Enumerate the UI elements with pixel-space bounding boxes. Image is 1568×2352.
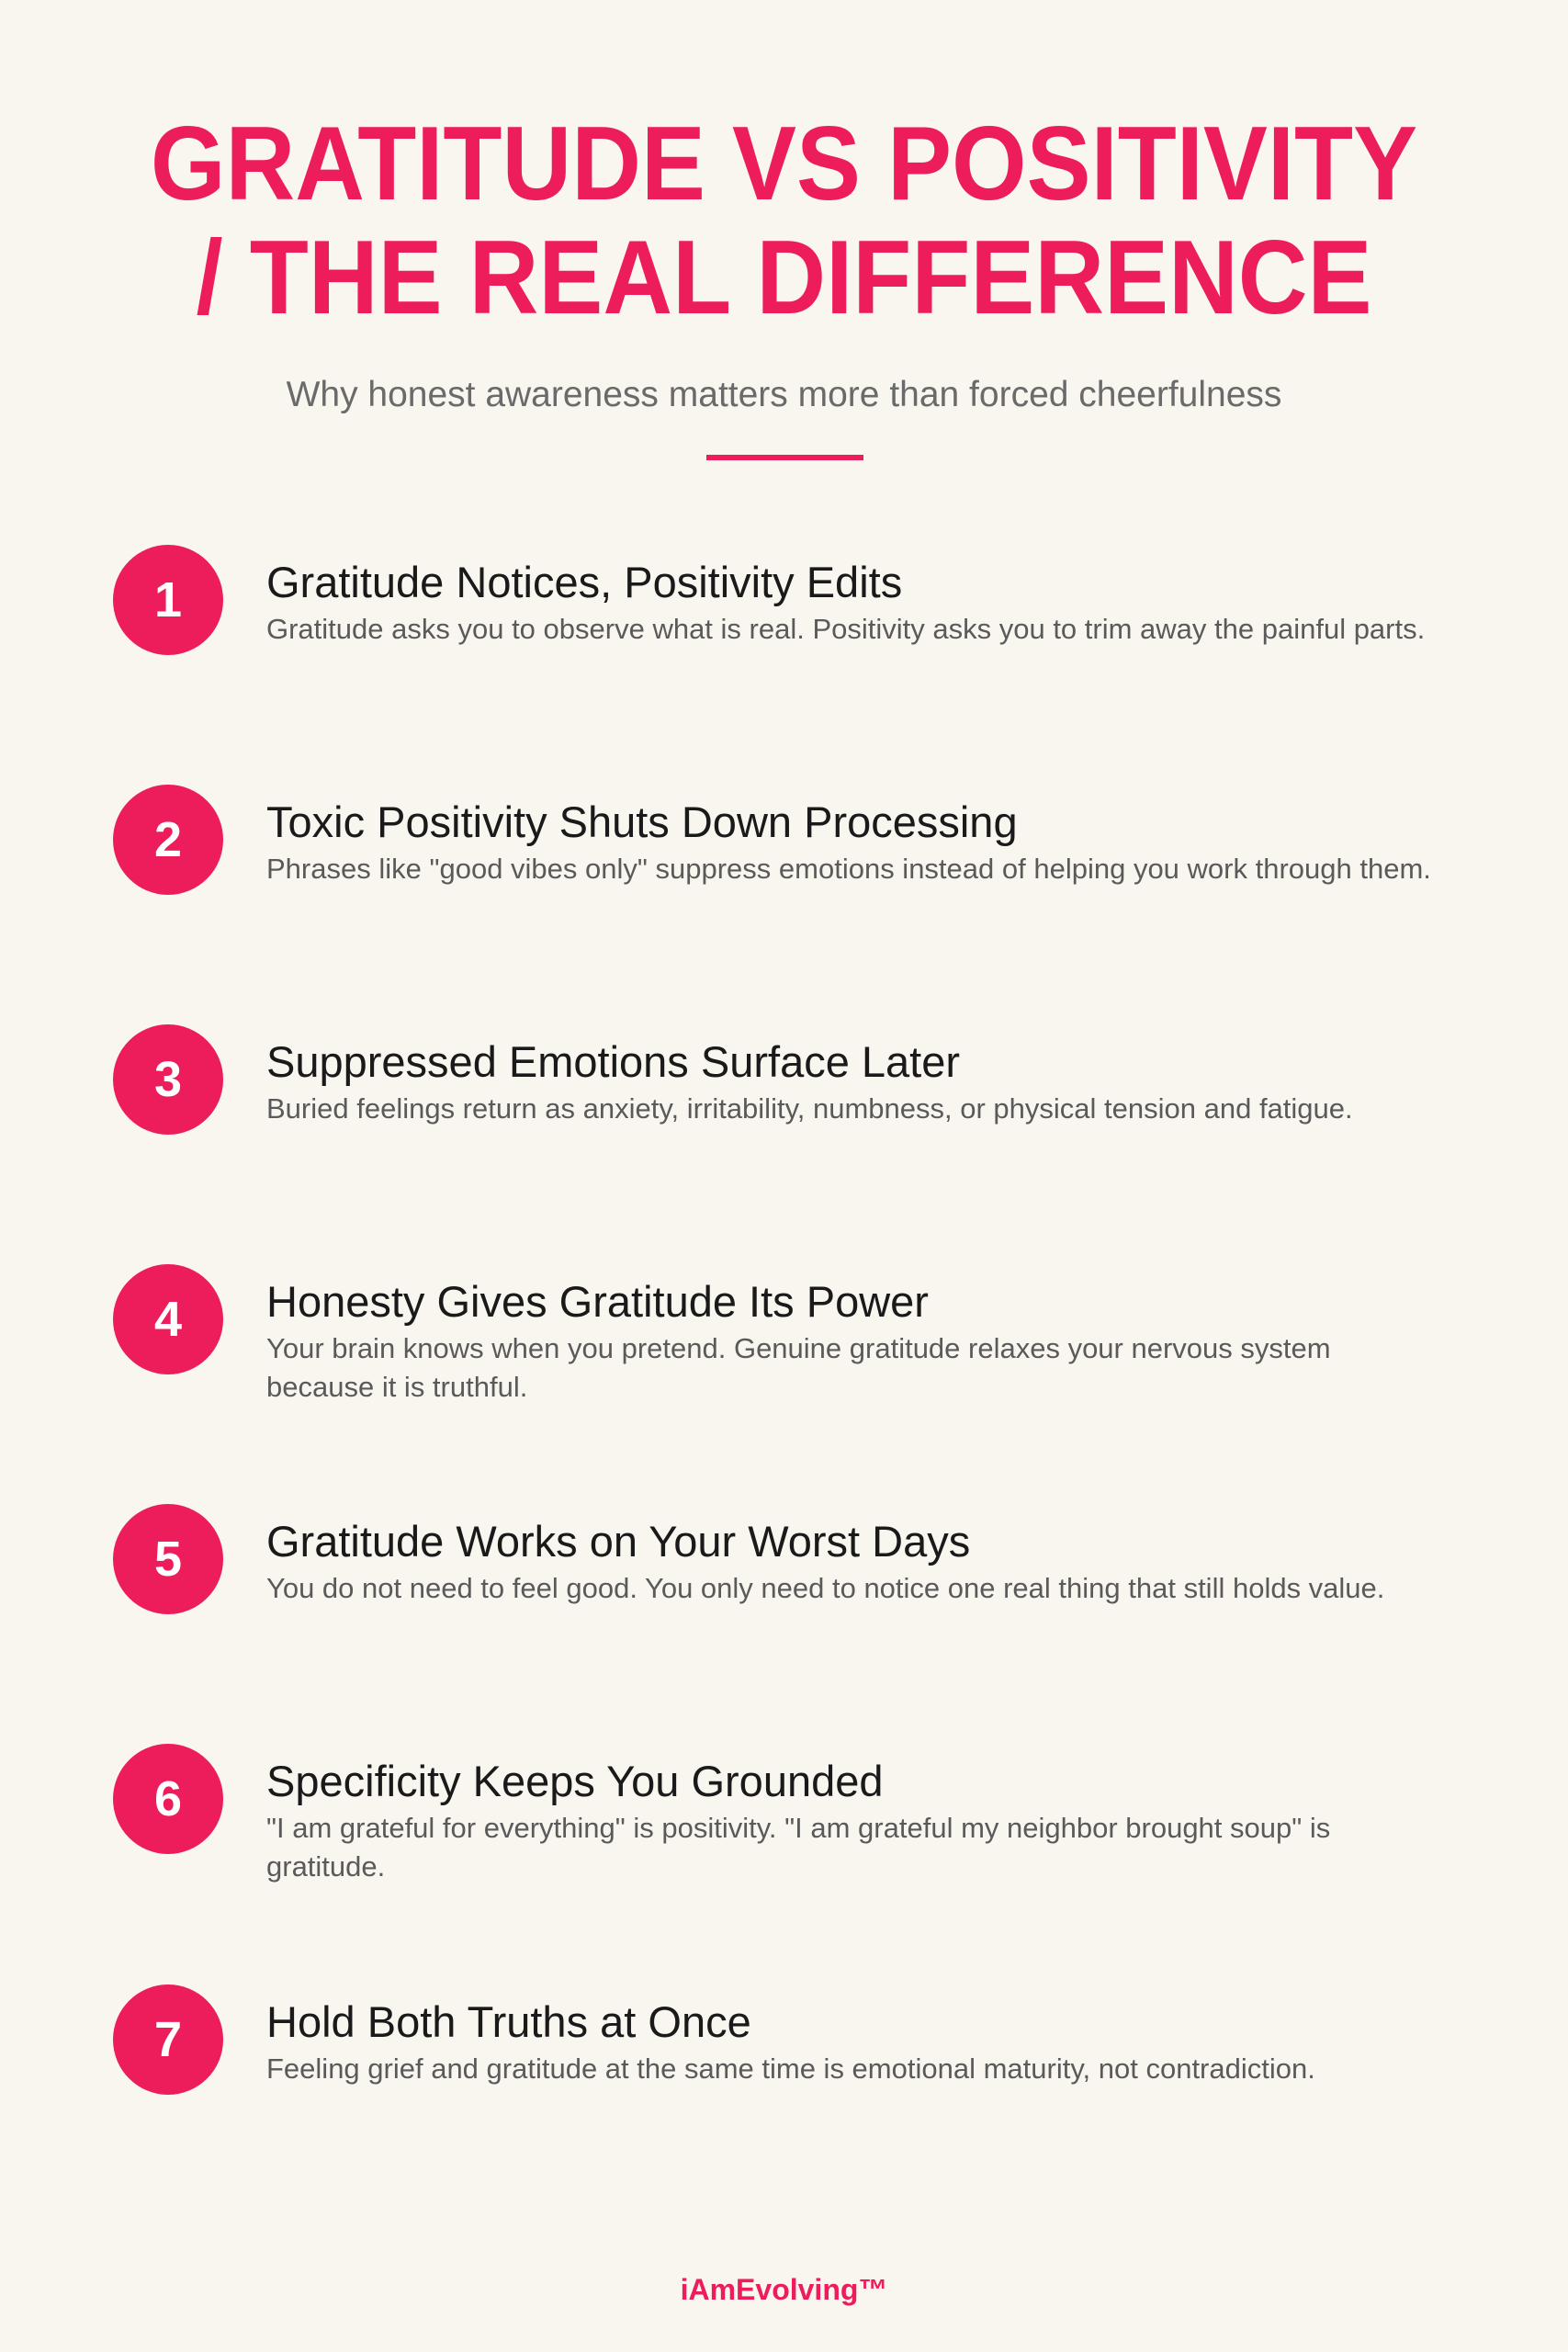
badge 2: 2 [154,812,182,867]
heading 6: Specificity Keeps You Grounded [266,1757,884,1805]
heading 4: Honesty Gives Gratitude Its Power [266,1277,929,1326]
heading 3: Suppressed Emotions Surface Later [266,1037,960,1086]
item 2 [113,785,1431,895]
badge 7: 7 [154,2012,182,2067]
badge 1 [113,545,223,655]
text 1: Gratitude asks you to observe what is real. Positivity asks you to trim away the painful parts. [266,613,1425,645]
title: / THE REAL DIFFERENCE [196,220,1372,336]
text 6: "I am grateful for everything" is positivity. "I am grateful my neighbor brought soup" is [266,1812,1330,1844]
item 7 [113,1984,1315,2095]
text 3: Buried feelings return as anxiety, irritability, numbness, or physical tension and fatigue. [266,1092,1353,1125]
badge 7 [113,1984,223,2095]
badge 3: 3 [154,1052,182,1107]
footer brand: iAmEvolving™ [681,2273,887,2306]
badge 4 [113,1264,223,1374]
text 4: Your brain knows when you pretend. Genuine gratitude relaxes your nervous system [266,1332,1331,1364]
title [151,106,1417,336]
text 2: Phrases like "good vibes only" suppress emotions instead of helping you work through them. [266,853,1431,885]
text 4 [266,1332,1331,1403]
badge 5: 5 [154,1532,182,1587]
heading 5: Gratitude Works on Your Worst Days [266,1517,970,1566]
badge 4: 4 [154,1292,182,1347]
badge 6: 6 [154,1771,182,1826]
text 7: Feeling grief and gratitude at the same time is emotional maturity, not contradiction. [266,2052,1315,2085]
badge 5 [113,1504,223,1614]
item 1 [113,545,1425,655]
text 6 [266,1812,1330,1883]
heading 2: Toxic Positivity Shuts Down Processing [266,797,1018,846]
item 4 [113,1264,1331,1403]
text 6: gratitude. [266,1850,385,1883]
heading 1: Gratitude Notices, Positivity Edits [266,558,902,606]
item 3 [113,1024,1353,1135]
item 5 [113,1504,1384,1614]
text 5: You do not need to feel good. You only need to notice one real thing that still holds value. [266,1572,1384,1604]
badge 1: 1 [154,572,182,628]
subtitle: Why honest awareness matters more than forced cheerfulness [287,375,1281,414]
title: GRATITUDE VS POSITIVITY [151,106,1417,222]
badge 6 [113,1744,223,1854]
badge 3 [113,1024,223,1135]
text 4: because it is truthful. [266,1371,527,1403]
badge 2 [113,785,223,895]
item 6 [113,1744,1330,1883]
heading 7: Hold Both Truths at Once [266,1997,751,2046]
